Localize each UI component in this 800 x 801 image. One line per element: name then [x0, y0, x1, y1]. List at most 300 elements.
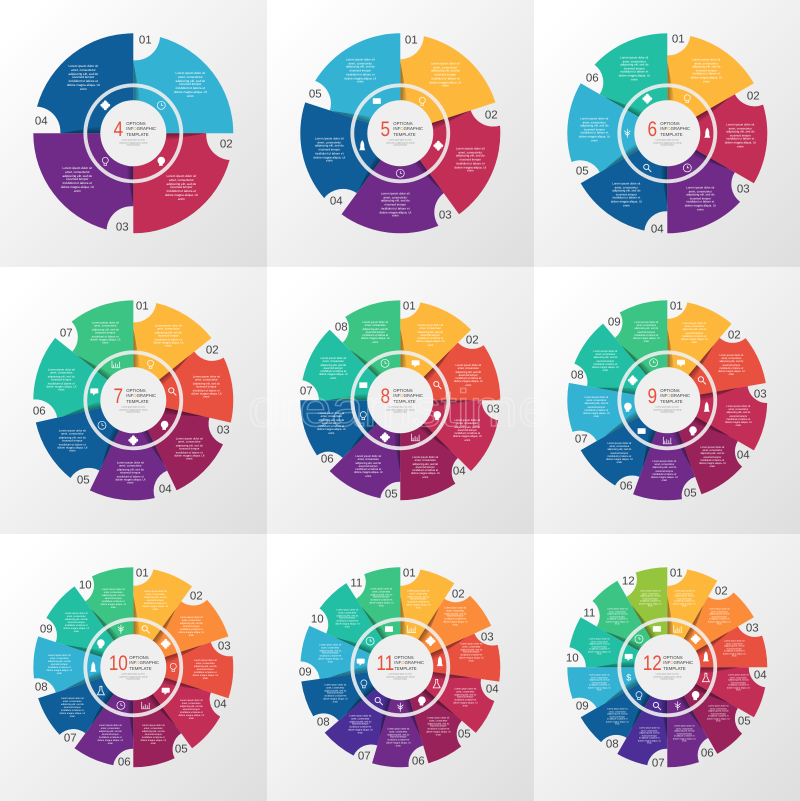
- label 01: 01: [403, 567, 416, 579]
- segment 07: [28, 633, 133, 747]
- segment 03: [133, 637, 245, 723]
- segment 01: [133, 303, 212, 400]
- text 01: Lorem ipsum dolor sit amet, consectetur adipiscing elit, sed do eiusmod tempor incididunt ut labore et dolore magna aliqua. Ut enim: [153, 323, 183, 348]
- text 04: Lorem ipsum dolor sit amet, consectetur adipiscing elit, sed do eiusmod tempor incididunt ut labore et dolore magna aliqua. Ut enim: [611, 182, 642, 207]
- label 02: 02: [728, 329, 741, 341]
- center caption: Lorem ipsum dolor sit amet, consectetur adipiscing elit, sed do eiusmod tempor: [653, 139, 681, 147]
- big number: 10: [109, 652, 128, 675]
- icon: chat: [357, 659, 365, 666]
- panel: 10 options chart: [0, 534, 267, 801]
- heading: [126, 388, 156, 404]
- label 03: 03: [754, 388, 767, 400]
- icon: rocket: [704, 128, 710, 138]
- label 03: 03: [218, 640, 231, 652]
- segment 05: [21, 366, 133, 488]
- text 07: Lorem ipsum dolor sit amet, consectetur adipiscing elit, sed do eiusmod tempor incididunt ut labore et dolore magna aliqua. Ut enim: [638, 728, 661, 745]
- text 09: Lorem ipsum dolor sit amet, consectetur adipiscing elit, sed do eiusmod tempor incididunt ut labore et dolore magna aliqua. Ut enim: [318, 645, 342, 663]
- segment 09: [296, 614, 400, 681]
- segment 07: [321, 652, 400, 761]
- segment 01: [400, 36, 495, 133]
- heading: INFOGRAPHIC: [393, 127, 423, 132]
- icon: clock: [157, 101, 165, 109]
- center disc: [634, 367, 700, 433]
- label 03: 03: [481, 631, 494, 643]
- segment 03: [624, 133, 752, 257]
- label 12: 12: [622, 575, 635, 587]
- text 06: Lorem ipsum dolor sit amet, consectetur adipiscing elit, sed do eiusmod tempor incididunt ut labore et dolore magna aliqua. Ut enim: [673, 726, 696, 743]
- text 03: Lorem ipsum dolor sit amet, consectetur adipiscing elit, sed do eiusmod tempor incididunt ut labore et dolore magna aliqua. Ut enim: [193, 659, 218, 680]
- heading: INFOGRAPHIC: [126, 127, 156, 132]
- icon: rocket: [359, 140, 365, 150]
- label 01: 01: [670, 567, 683, 579]
- segment 04: [115, 667, 226, 753]
- panel: 9 options chart: [534, 267, 800, 534]
- segment 02: [133, 340, 258, 461]
- segment 05: [607, 400, 701, 514]
- icon: briefcase: [359, 382, 367, 388]
- text 10: Lorem ipsum dolor sit amet, consectetur adipiscing elit, sed do eiusmod tempor incididunt ut labore et dolore magna aliqua. Ut enim: [101, 588, 126, 609]
- text 10: Lorem ipsum dolor sit amet, consectetur adipiscing elit, sed do eiusmod tempor incididunt ut labore et dolore magna aliqua. Ut enim: [588, 639, 611, 656]
- segment 02: [400, 585, 499, 697]
- center disc: [634, 634, 700, 700]
- label 03: 03: [116, 221, 129, 233]
- label 01: 01: [405, 34, 418, 46]
- icon: dollar: $: [626, 673, 631, 683]
- heading: OPTIONS: [393, 388, 413, 393]
- icon: head: [158, 157, 165, 166]
- segment 07: [550, 345, 667, 449]
- text 06: Lorem ipsum dolor sit amet, consectetur adipiscing elit, sed do eiusmod tempor incididunt ut labore et dolore magna aliqua. Ut enim: [386, 729, 410, 747]
- ring: [352, 619, 448, 715]
- center caption: Lorem ipsum dolor sit amet, consectetur adipiscing elit, sed do eiusmod tempor: [119, 673, 147, 681]
- label 04: 04: [159, 483, 172, 495]
- center disc: [367, 100, 433, 166]
- text 06: Lorem ipsum dolor sit amet, consectetur adipiscing elit, sed do eiusmod tempor incididunt ut labore et dolore magna aliqua. Ut enim: [619, 56, 650, 81]
- segment 10: [76, 554, 181, 667]
- icon: chart: [663, 437, 672, 444]
- segment 03: [400, 400, 498, 471]
- pie chart: 11 segments: [300, 567, 500, 768]
- label 02: 02: [747, 90, 760, 102]
- segment 06: [583, 10, 711, 133]
- label 08: 08: [571, 369, 584, 381]
- segment 04: [393, 667, 497, 735]
- label 06: 06: [412, 755, 425, 767]
- heading: OPTIONS: [126, 121, 146, 126]
- icon: puzzle: [628, 375, 638, 385]
- label 02: 02: [485, 109, 498, 121]
- segment 07: [57, 278, 182, 400]
- icon: magnifier: [169, 388, 176, 395]
- label 03: 03: [737, 183, 750, 195]
- text 01: Lorem ipsum dolor sit amet, consectetur adipiscing elit, sed do eiusmod tempor incididunt ut labore et dolore magna aliqua. Ut enim: [673, 591, 696, 608]
- label 09: 09: [576, 700, 589, 712]
- ring: [619, 352, 715, 448]
- text 03: Lorem ipsum dolor sit amet, consectetur adipiscing elit, sed do eiusmod tempor incididunt ut labore et dolore magna aliqua. Ut enim: [379, 191, 411, 218]
- segment 03: [323, 133, 457, 268]
- text 10: Lorem ipsum dolor sit amet, consectetur adipiscing elit, sed do eiusmod tempor incididunt ut labore et dolore magna aliqua. Ut enim: [335, 610, 359, 628]
- center disc: [367, 367, 433, 433]
- heading: OPTIONS: [126, 388, 146, 393]
- heading: TEMPLATE: [126, 132, 149, 137]
- text 05: Lorem ipsum dolor sit amet, consectetur adipiscing elit, sed do eiusmod tempor incididunt ut labore et dolore magna aliqua. Ut enim: [344, 57, 376, 84]
- text 11: Lorem ipsum dolor sit amet, consectetur adipiscing elit, sed do eiusmod tempor incididunt ut labore et dolore magna aliqua. Ut enim: [369, 589, 393, 607]
- heading: INFOGRAPHIC: [660, 394, 690, 399]
- icon: puzzle: [100, 100, 110, 110]
- icon: bulb: [170, 663, 176, 671]
- center disc: [367, 634, 433, 700]
- heading: TEMPLATE: [660, 399, 683, 404]
- panel: 7 options chart: [0, 267, 267, 534]
- segment 03: [400, 627, 512, 717]
- label 03: 03: [439, 209, 452, 221]
- panel: 12 options chart: [534, 534, 800, 801]
- text 07: Lorem ipsum dolor sit amet, consectetur adipiscing elit, sed do eiusmod tempor incididunt ut labore et dolore magna aliqua. Ut enim: [90, 320, 120, 345]
- label 11: 11: [583, 607, 595, 619]
- center caption: Lorem ipsum dolor sit amet, consectetur adipiscing elit, sed do eiusmod tempor: [386, 139, 414, 147]
- segment 07: [617, 667, 667, 765]
- label 07: 07: [60, 327, 73, 339]
- text 05: Lorem ipsum dolor sit amet, consectetur adipiscing elit, sed do eiusmod tempor incididunt ut labore et dolore magna aliqua. Ut enim: [57, 428, 87, 453]
- segment 08: [291, 626, 400, 731]
- icon: head: [434, 411, 441, 420]
- text 11: Lorem ipsum dolor sit amet, consectetur adipiscing elit, sed do eiusmod tempor incididunt ut labore et dolore magna aliqua. Ut enim: [606, 609, 629, 626]
- label 07: 07: [64, 732, 77, 744]
- icon: head: [689, 426, 697, 435]
- icon: chat: [412, 360, 420, 367]
- segment 02: [667, 85, 795, 208]
- label 04: 04: [453, 465, 466, 477]
- text 07: Lorem ipsum dolor sit amet, consectetur adipiscing elit, sed do eiusmod tempor incididunt ut labore et dolore magna aliqua. Ut enim: [583, 396, 610, 418]
- label 06: 06: [701, 747, 714, 759]
- heading: TEMPLATE: [126, 399, 149, 404]
- segment 04: [37, 33, 133, 133]
- segment 06: [624, 667, 716, 777]
- panel: 11 options chart: [267, 534, 534, 801]
- text 09: Lorem ipsum dolor sit amet, consectetur adipiscing elit, sed do eiusmod tempor incididunt ut labore et dolore magna aliqua. Ut enim: [588, 675, 611, 692]
- heading: TEMPLATE: [660, 132, 683, 137]
- label 06: 06: [321, 453, 334, 465]
- icon: chat: [677, 360, 685, 367]
- label 01: 01: [136, 300, 149, 312]
- center caption: Lorem ipsum dolor sit amet, consectetur adipiscing elit, sed do eiusmod tempor: [386, 673, 414, 681]
- center disc: [100, 100, 166, 166]
- icon: chart: [408, 625, 416, 632]
- segment 06: [281, 350, 400, 470]
- label 02: 02: [715, 585, 728, 597]
- heading: INFOGRAPHIC: [663, 661, 693, 666]
- center disc: [100, 634, 166, 700]
- label 02: 02: [466, 334, 479, 346]
- label 05: 05: [576, 165, 589, 177]
- icon: magnifier: [142, 626, 150, 633]
- label 01: 01: [136, 567, 149, 579]
- text 02: Lorem ipsum dolor sit amet, consectetur adipiscing elit, sed do eiusmod tempor incididunt ut labore et dolore magna aliqua. Ut enim: [454, 364, 483, 387]
- segment 06: [74, 667, 133, 765]
- segment 10: [311, 577, 423, 667]
- label 08: 08: [335, 321, 348, 333]
- segment 03: [116, 400, 228, 498]
- pie chart: 12 segments: [567, 567, 768, 768]
- icon: chart: [674, 625, 682, 632]
- text 06: Lorem ipsum dolor sit amet, consectetur adipiscing elit, sed do eiusmod tempor incididunt ut labore et dolore magna aliqua. Ut enim: [46, 367, 76, 392]
- text 02: Lorem ipsum dolor sit amet, consectetur adipiscing elit, sed do eiusmod tempor incididunt ut labore et dolore magna aliqua. Ut enim: [725, 123, 756, 148]
- text 12: Lorem ipsum dolor sit amet, consectetur adipiscing elit, sed do eiusmod tempor incididunt ut labore et dolore magna aliqua. Ut enim: [639, 591, 662, 608]
- segment 02: [667, 325, 779, 442]
- icon: rocket: [704, 402, 710, 412]
- icon: bulb: [148, 360, 154, 368]
- icon: magnifier: [698, 377, 706, 384]
- text 03: Lorem ipsum dolor sit amet, consectetur adipiscing elit, sed do eiusmod tempor incididunt ut labore et dolore magna aliqua. Ut enim: [685, 186, 716, 211]
- ring: [352, 85, 448, 181]
- panel: 4 options chart: [0, 0, 267, 267]
- icon: puzzle: [433, 141, 443, 151]
- segment 04: [581, 133, 667, 231]
- segment 05: [330, 400, 400, 498]
- icon: magnifier: [644, 164, 651, 172]
- icon: puzzle: [691, 634, 700, 644]
- text 02: Lorem ipsum dolor sit amet, consectetur adipiscing elit, sed do eiusmod tempor incididunt ut labore et dolore magna aliqua. Ut enim: [443, 608, 467, 626]
- segment 12: [618, 558, 711, 667]
- icon: briefcase: [653, 626, 661, 632]
- text 04: Lorem ipsum dolor sit amet, consectetur adipiscing elit, sed do eiusmod tempor incididunt ut labore et dolore magna aliqua. Ut enim: [115, 460, 145, 485]
- segment 01: [667, 569, 717, 667]
- label 05: 05: [458, 728, 471, 740]
- segment 02: [133, 133, 230, 233]
- heading: OPTIONS: [663, 655, 683, 660]
- text 08: Lorem ipsum dolor sit amet, consectetur adipiscing elit, sed do eiusmod tempor incididunt ut labore et dolore magna aliqua. Ut enim: [47, 654, 72, 675]
- heading: OPTIONS: [660, 388, 680, 393]
- segment 01: [400, 302, 471, 400]
- icon: clock: [381, 359, 389, 367]
- icon: puzzle: [426, 636, 435, 646]
- icon: chat: [625, 654, 633, 661]
- text 05: Lorem ipsum dolor sit amet, consectetur adipiscing elit, sed do eiusmod tempor incididunt ut labore et dolore magna aliqua. Ut enim: [141, 724, 166, 745]
- label 04: 04: [737, 449, 750, 461]
- label 09: 09: [40, 623, 53, 635]
- text 08: Lorem ipsum dolor sit amet, consectetur adipiscing elit, sed do eiusmod tempor incididunt ut labore et dolore magna aliqua. Ut enim: [606, 709, 629, 726]
- text 03: Lorem ipsum dolor sit amet, consectetur adipiscing elit, sed do eiusmod tempor incididunt ut labore et dolore magna aliqua. Ut enim: [61, 166, 94, 193]
- label 10: 10: [79, 579, 92, 591]
- segment 02: [400, 103, 522, 224]
- text 01: Lorem ipsum dolor sit amet, consectetur adipiscing elit, sed do eiusmod tempor incididunt ut labore et dolore magna aliqua. Ut enim: [174, 71, 207, 98]
- icon: rocket: [90, 662, 96, 672]
- ring: [352, 352, 448, 448]
- label 06: 06: [33, 405, 46, 417]
- icon: head: [97, 639, 105, 648]
- ring: [619, 85, 715, 181]
- label 07: 07: [358, 750, 371, 762]
- label 10: 10: [566, 652, 579, 664]
- icon: bulb: [102, 157, 108, 165]
- text 02: Lorem ipsum dolor sit amet, consectetur adipiscing elit, sed do eiusmod tempor incididunt ut labore et dolore magna aliqua. Ut enim: [179, 616, 204, 637]
- text 02: Lorem ipsum dolor sit amet, consectetur adipiscing elit, sed do eiusmod tempor incididunt ut labore et dolore magna aliqua. Ut enim: [708, 609, 731, 626]
- segment 09: [558, 624, 667, 716]
- center caption: Lorem ipsum dolor sit amet, consectetur adipiscing elit, sed do eiusmod tempor: [386, 406, 414, 414]
- segment 01: [400, 569, 454, 667]
- segment 09: [604, 284, 717, 400]
- icon: chat: [162, 688, 170, 695]
- pie chart: 8 segments: [300, 300, 500, 500]
- pie chart: 9 segments: [567, 300, 768, 500]
- label 04: 04: [754, 669, 767, 681]
- text 03: Lorem ipsum dolor sit amet, consectetur adipiscing elit, sed do eiusmod tempor incididunt ut labore et dolore magna aliqua. Ut enim: [174, 436, 204, 461]
- text 03: Lorem ipsum dolor sit amet, consectetur adipiscing elit, sed do eiusmod tempor incididunt ut labore et dolore magna aliqua. Ut enim: [723, 641, 746, 658]
- label 03: 03: [746, 622, 759, 634]
- label 01: 01: [139, 34, 152, 46]
- label 05: 05: [684, 487, 697, 499]
- big number: 5: [381, 118, 390, 141]
- icon: clock: [683, 164, 691, 172]
- center caption: Lorem ipsum dolor sit amet, consectetur adipiscing elit, sed do eiusmod tempor: [653, 673, 681, 681]
- label 02: 02: [206, 344, 219, 356]
- icon: clock: [635, 635, 643, 643]
- label 04: 04: [330, 195, 343, 207]
- label 02: 02: [452, 588, 465, 600]
- text 05: Lorem ipsum dolor sit amet, consectetur adipiscing elit, sed do eiusmod tempor incididunt ut labore et dolore magna aliqua. Ut enim: [354, 455, 383, 478]
- segment 03: [667, 383, 775, 464]
- heading: [663, 655, 693, 671]
- heading: TEMPLATE: [663, 666, 686, 671]
- text 02: Lorem ipsum dolor sit amet, consectetur adipiscing elit, sed do eiusmod tempor incididunt ut labore et dolore magna aliqua. Ut enim: [191, 374, 221, 399]
- icon: puzzle: [380, 432, 390, 442]
- text 06: Lorem ipsum dolor sit amet, consectetur adipiscing elit, sed do eiusmod tempor incididunt ut labore et dolore magna aliqua. Ut enim: [98, 724, 123, 745]
- text 03: Lorem ipsum dolor sit amet, consectetur adipiscing elit, sed do eiusmod tempor incididunt ut labore et dolore magna aliqua. Ut enim: [459, 644, 483, 662]
- heading: INFOGRAPHIC: [126, 394, 156, 399]
- segment 01: [667, 36, 754, 133]
- text 04: Lorem ipsum dolor sit amet, consectetur adipiscing elit, sed do eiusmod tempor incididunt ut labore et dolore magna aliqua. Ut enim: [179, 699, 204, 720]
- text 09: Lorem ipsum dolor sit amet, consectetur adipiscing elit, sed do eiusmod tempor incididunt ut labore et dolore magna aliqua. Ut enim: [633, 321, 660, 343]
- heading: [394, 655, 424, 671]
- segment 04: [667, 667, 765, 717]
- pie chart: 10 segments: [33, 567, 234, 768]
- segment 05: [642, 667, 752, 760]
- text 08: Lorem ipsum dolor sit amet, consectetur adipiscing elit, sed do eiusmod tempor incididunt ut labore et dolore magna aliqua. Ut enim: [592, 350, 619, 372]
- pie chart: 6 segments: [567, 33, 768, 234]
- label 04: 04: [35, 115, 48, 127]
- text 04: Lorem ipsum dolor sit amet, consectetur adipiscing elit, sed do eiusmod tempor incididunt ut labore et dolore magna aliqua. Ut enim: [699, 446, 726, 468]
- segment 08: [571, 320, 678, 400]
- heading: INFOGRAPHIC: [129, 661, 159, 666]
- segment 10: [569, 617, 667, 667]
- text 01: Lorem ipsum dolor sit amet, consectetur adipiscing elit, sed do eiusmod tempor incididunt ut labore et dolore magna aliqua. Ut enim: [429, 61, 461, 88]
- ring: [85, 619, 181, 715]
- segment 04: [350, 400, 470, 520]
- text 06: Lorem ipsum dolor sit amet, consectetur adipiscing elit, sed do eiusmod tempor incididunt ut labore et dolore magna aliqua. Ut enim: [606, 442, 633, 464]
- icon: bulb: [636, 692, 642, 700]
- segment 05: [308, 13, 430, 133]
- icon: head: [692, 691, 699, 700]
- heading: [660, 121, 690, 137]
- watermark: dreamstime: [248, 380, 550, 438]
- segment 07: [302, 330, 400, 400]
- segment 08: [22, 611, 133, 698]
- text 01: Lorem ipsum dolor sit amet, consectetur adipiscing elit, sed do eiusmod tempor incididunt ut labore et dolore magna aliqua. Ut enim: [681, 322, 708, 344]
- icon: flask: [97, 686, 104, 695]
- heading: OPTIONS: [394, 655, 414, 660]
- icon: magnifier: [375, 697, 383, 705]
- text 04: Lorem ipsum dolor sit amet, consectetur adipiscing elit, sed do eiusmod tempor incididunt ut labore et dolore magna aliqua. Ut enim: [411, 456, 440, 479]
- icon: clock: [117, 701, 125, 709]
- icon: chart: [142, 702, 150, 709]
- icon: clock: [650, 359, 658, 367]
- text 02: Lorem ipsum dolor sit amet, consectetur adipiscing elit, sed do eiusmod tempor incididunt ut labore et dolore magna aliqua. Ut enim: [454, 146, 486, 173]
- segment 06: [573, 378, 667, 492]
- segment 02: [667, 583, 760, 692]
- text 04: Lorem ipsum dolor sit amet, consectetur adipiscing elit, sed do eiusmod tempor incididunt ut labore et dolore magna aliqua. Ut enim: [313, 136, 345, 163]
- label 01: 01: [403, 300, 416, 312]
- segment 06: [21, 324, 133, 422]
- label 05: 05: [175, 743, 188, 755]
- heading: TEMPLATE: [129, 666, 152, 671]
- text 04: Lorem ipsum dolor sit amet, consectetur adipiscing elit, sed do eiusmod tempor incididunt ut labore et dolore magna aliqua. Ut enim: [67, 64, 100, 91]
- text 01: Lorem ipsum dolor sit amet, consectetur adipiscing elit, sed do eiusmod tempor incididunt ut labore et dolore magna aliqua. Ut enim: [416, 324, 445, 347]
- segment 05: [540, 58, 667, 182]
- icon: chart: [412, 434, 420, 441]
- label 06: 06: [118, 756, 131, 768]
- segment 02: [400, 331, 520, 450]
- center caption: Lorem ipsum dolor sit amet, consectetur adipiscing elit, sed do eiusmod tempor: [119, 139, 147, 147]
- pie chart: 4 segments: [33, 33, 234, 234]
- segment 05: [86, 667, 191, 781]
- label 04: 04: [486, 683, 499, 695]
- text 08: Lorem ipsum dolor sit amet, consectetur adipiscing elit, sed do eiusmod tempor incididunt ut labore et dolore magna aliqua. Ut enim: [323, 685, 347, 703]
- segment 03: [33, 133, 133, 230]
- icon: lamp: [397, 703, 403, 712]
- text 04: Lorem ipsum dolor sit amet, consectetur adipiscing elit, sed do eiusmod tempor incididunt ut labore et dolore magna aliqua. Ut enim: [453, 689, 477, 707]
- segment 08: [575, 642, 667, 752]
- icon: head: [161, 421, 168, 430]
- icon: lamp: [675, 701, 681, 710]
- icon: puzzle: [161, 639, 171, 649]
- segment 11: [347, 556, 446, 667]
- icon: briefcase: [373, 98, 381, 104]
- heading: TEMPLATE: [394, 666, 417, 671]
- icon: briefcase: [638, 428, 646, 434]
- text 08: Lorem ipsum dolor sit amet, consectetur adipiscing elit, sed do eiusmod tempor incididunt ut labore et dolore magna aliqua. Ut enim: [361, 321, 390, 344]
- label 11: 11: [350, 577, 362, 589]
- text 07: Lorem ipsum dolor sit amet, consectetur adipiscing elit, sed do eiusmod tempor incididunt ut labore et dolore magna aliqua. Ut enim: [348, 716, 372, 734]
- center caption: Lorem ipsum dolor sit amet, consectetur adipiscing elit, sed do eiusmod tempor: [653, 406, 681, 414]
- icon: bulb: [360, 412, 366, 420]
- label 10: 10: [311, 613, 324, 625]
- label 07: 07: [575, 433, 588, 445]
- ring: [85, 85, 181, 181]
- text 05: Lorem ipsum dolor sit amet, consectetur adipiscing elit, sed do eiusmod tempor incididunt ut labore et dolore magna aliqua. Ut enim: [579, 117, 610, 142]
- text 07: Lorem ipsum dolor sit amet, consectetur adipiscing elit, sed do eiusmod tempor incididunt ut labore et dolore magna aliqua. Ut enim: [60, 697, 85, 718]
- segment 04: [63, 400, 176, 522]
- icon: magnifier: [653, 702, 661, 710]
- text 04: Lorem ipsum dolor sit amet, consectetur adipiscing elit, sed do eiusmod tempor incididunt ut labore et dolore magna aliqua. Ut enim: [727, 675, 750, 692]
- label 05: 05: [385, 488, 398, 500]
- label 09: 09: [608, 316, 621, 328]
- label 02: 02: [220, 138, 233, 150]
- icon: chat: [90, 388, 98, 395]
- text 05: Lorem ipsum dolor sit amet, consectetur adipiscing elit, sed do eiusmod tempor incididunt ut labore et dolore magna aliqua. Ut enim: [426, 718, 450, 736]
- segment 11: [583, 575, 692, 667]
- segment 01: [667, 302, 732, 400]
- segment 01: [133, 37, 233, 133]
- icon: magnifier: [434, 381, 441, 389]
- segment 02: [133, 588, 238, 702]
- center disc: [634, 100, 700, 166]
- segment 09: [40, 581, 151, 667]
- icon: flask: [433, 679, 440, 688]
- pie chart: 7 segments: [33, 300, 234, 500]
- label 07: 07: [652, 757, 665, 769]
- icon: clock: [98, 421, 106, 429]
- icon: puzzle: [642, 94, 652, 104]
